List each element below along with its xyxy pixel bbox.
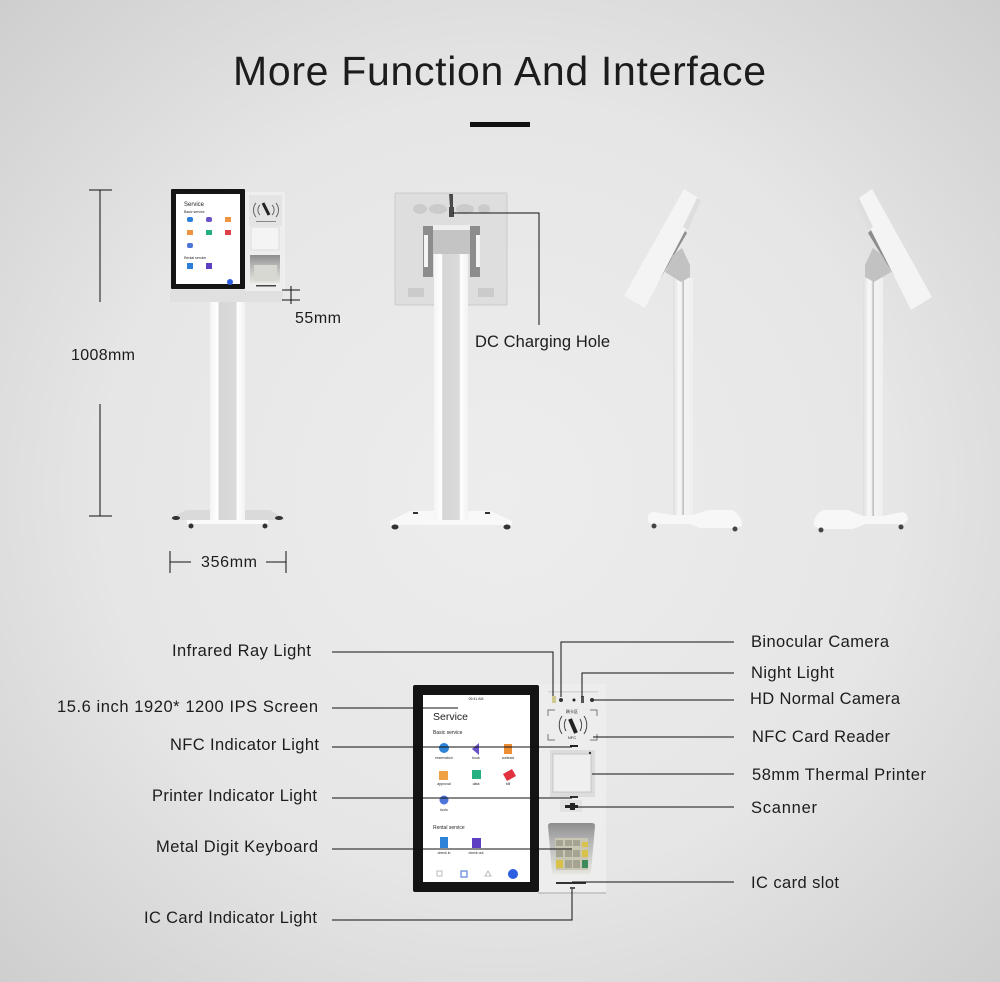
title: More Function And Interface	[233, 48, 766, 94]
app: icon captions: check out	[469, 851, 484, 855]
callout: binocular camera	[561, 633, 890, 697]
side base	[814, 510, 908, 529]
callout: thermal printer: 58mm Thermal Printer	[752, 766, 926, 784]
app: icon captions: reservation	[435, 756, 453, 760]
callout: scanner: Scanner	[751, 799, 818, 817]
tilted screen	[624, 189, 701, 308]
hinge	[865, 248, 891, 282]
app: icon captions: data	[473, 782, 479, 786]
touch screen: Basic service	[184, 210, 205, 214]
NFC reader	[548, 708, 597, 740]
callout: metal digit keyboard: Metal Digit Keyboard	[156, 838, 318, 856]
callout: night light	[582, 664, 834, 697]
app: icon captions	[435, 756, 514, 855]
app: heading: Service	[433, 711, 468, 723]
app: icon captions: tools	[440, 808, 448, 812]
tilted screen	[856, 189, 932, 310]
rear pole	[434, 254, 468, 520]
app: icon captions: contract	[502, 756, 514, 760]
screen: Basic service	[433, 730, 463, 736]
side module	[538, 684, 606, 894]
dimension: height 1008mm: 1008mm	[71, 347, 135, 364]
kiosk body	[170, 290, 283, 302]
app: icon captions: bill	[506, 782, 510, 786]
callout: NFC indicator light: NFC Indicator Light	[170, 736, 319, 754]
side pole	[863, 278, 883, 518]
IC card slot	[556, 882, 586, 884]
NFC reader: NFC	[568, 735, 576, 740]
product: side view left	[624, 189, 742, 532]
arm	[868, 230, 901, 279]
product: front view kiosk	[170, 189, 285, 528]
dimension: width 356mm: 356mm	[201, 554, 257, 571]
callout: infrared ray light	[172, 642, 553, 696]
callout: night light: Night Light	[751, 664, 834, 682]
callout: IC card indicator light: IC Card Indicator Light	[144, 909, 317, 927]
app: icon captions: book	[472, 756, 480, 760]
side pole	[673, 278, 693, 518]
app: tab bar	[437, 869, 518, 879]
thermal printer	[550, 750, 595, 797]
DC port	[449, 194, 454, 217]
camera row	[548, 691, 598, 703]
product: side view right	[814, 189, 932, 532]
callout: binocular camera: Binocular Camera	[751, 633, 890, 651]
app: icon captions: check in	[438, 851, 450, 855]
callout: IC card slot: IC card slot	[751, 874, 839, 892]
app: icon captions: approval	[437, 782, 451, 786]
arm	[655, 230, 687, 279]
title accent bar	[470, 122, 530, 127]
keypad	[548, 823, 595, 874]
hinge	[665, 248, 690, 282]
side base	[648, 510, 742, 528]
callout: NFC card reader: NFC Card Reader	[752, 728, 890, 746]
dimension: height 1008mm	[71, 190, 135, 516]
screen: Rental service	[433, 825, 465, 831]
mount bracket	[423, 225, 480, 277]
callout: DC charging hole	[453, 213, 610, 351]
side panel	[245, 192, 285, 291]
dimension: 55mm base thickness	[282, 286, 341, 327]
callout: infrared ray light: Infrared Ray Light	[172, 642, 311, 660]
dimension: 55mm base thickness: 55mm	[295, 310, 341, 327]
callout: HD normal camera: HD Normal Camera	[750, 690, 901, 708]
callout: DC charging hole: DC Charging Hole	[475, 333, 610, 351]
vent holes	[408, 204, 494, 297]
stand pole	[210, 302, 245, 520]
product: interface detail kiosk	[413, 684, 606, 894]
app: icons	[439, 743, 516, 848]
dimension: width 356mm	[170, 551, 286, 573]
callout: IC card indicator light	[144, 889, 572, 927]
screen	[413, 685, 539, 892]
rear stand base	[390, 510, 512, 530]
stand base	[171, 510, 284, 528]
scanner	[560, 800, 582, 812]
touch screen: Rental service	[184, 256, 206, 260]
NFC reader: 刷卡区	[566, 708, 578, 714]
touch screen	[171, 189, 245, 289]
callout: screen: 15.6 inch 1920* 1200 IPS Screen	[57, 698, 318, 716]
touch screen: Service	[184, 202, 205, 208]
app: status bar: 09:41 AM	[469, 697, 483, 701]
product: rear view kiosk	[390, 193, 512, 530]
callout: printer indicator light: Printer Indicator Light	[152, 787, 317, 805]
rear panel	[395, 193, 507, 305]
